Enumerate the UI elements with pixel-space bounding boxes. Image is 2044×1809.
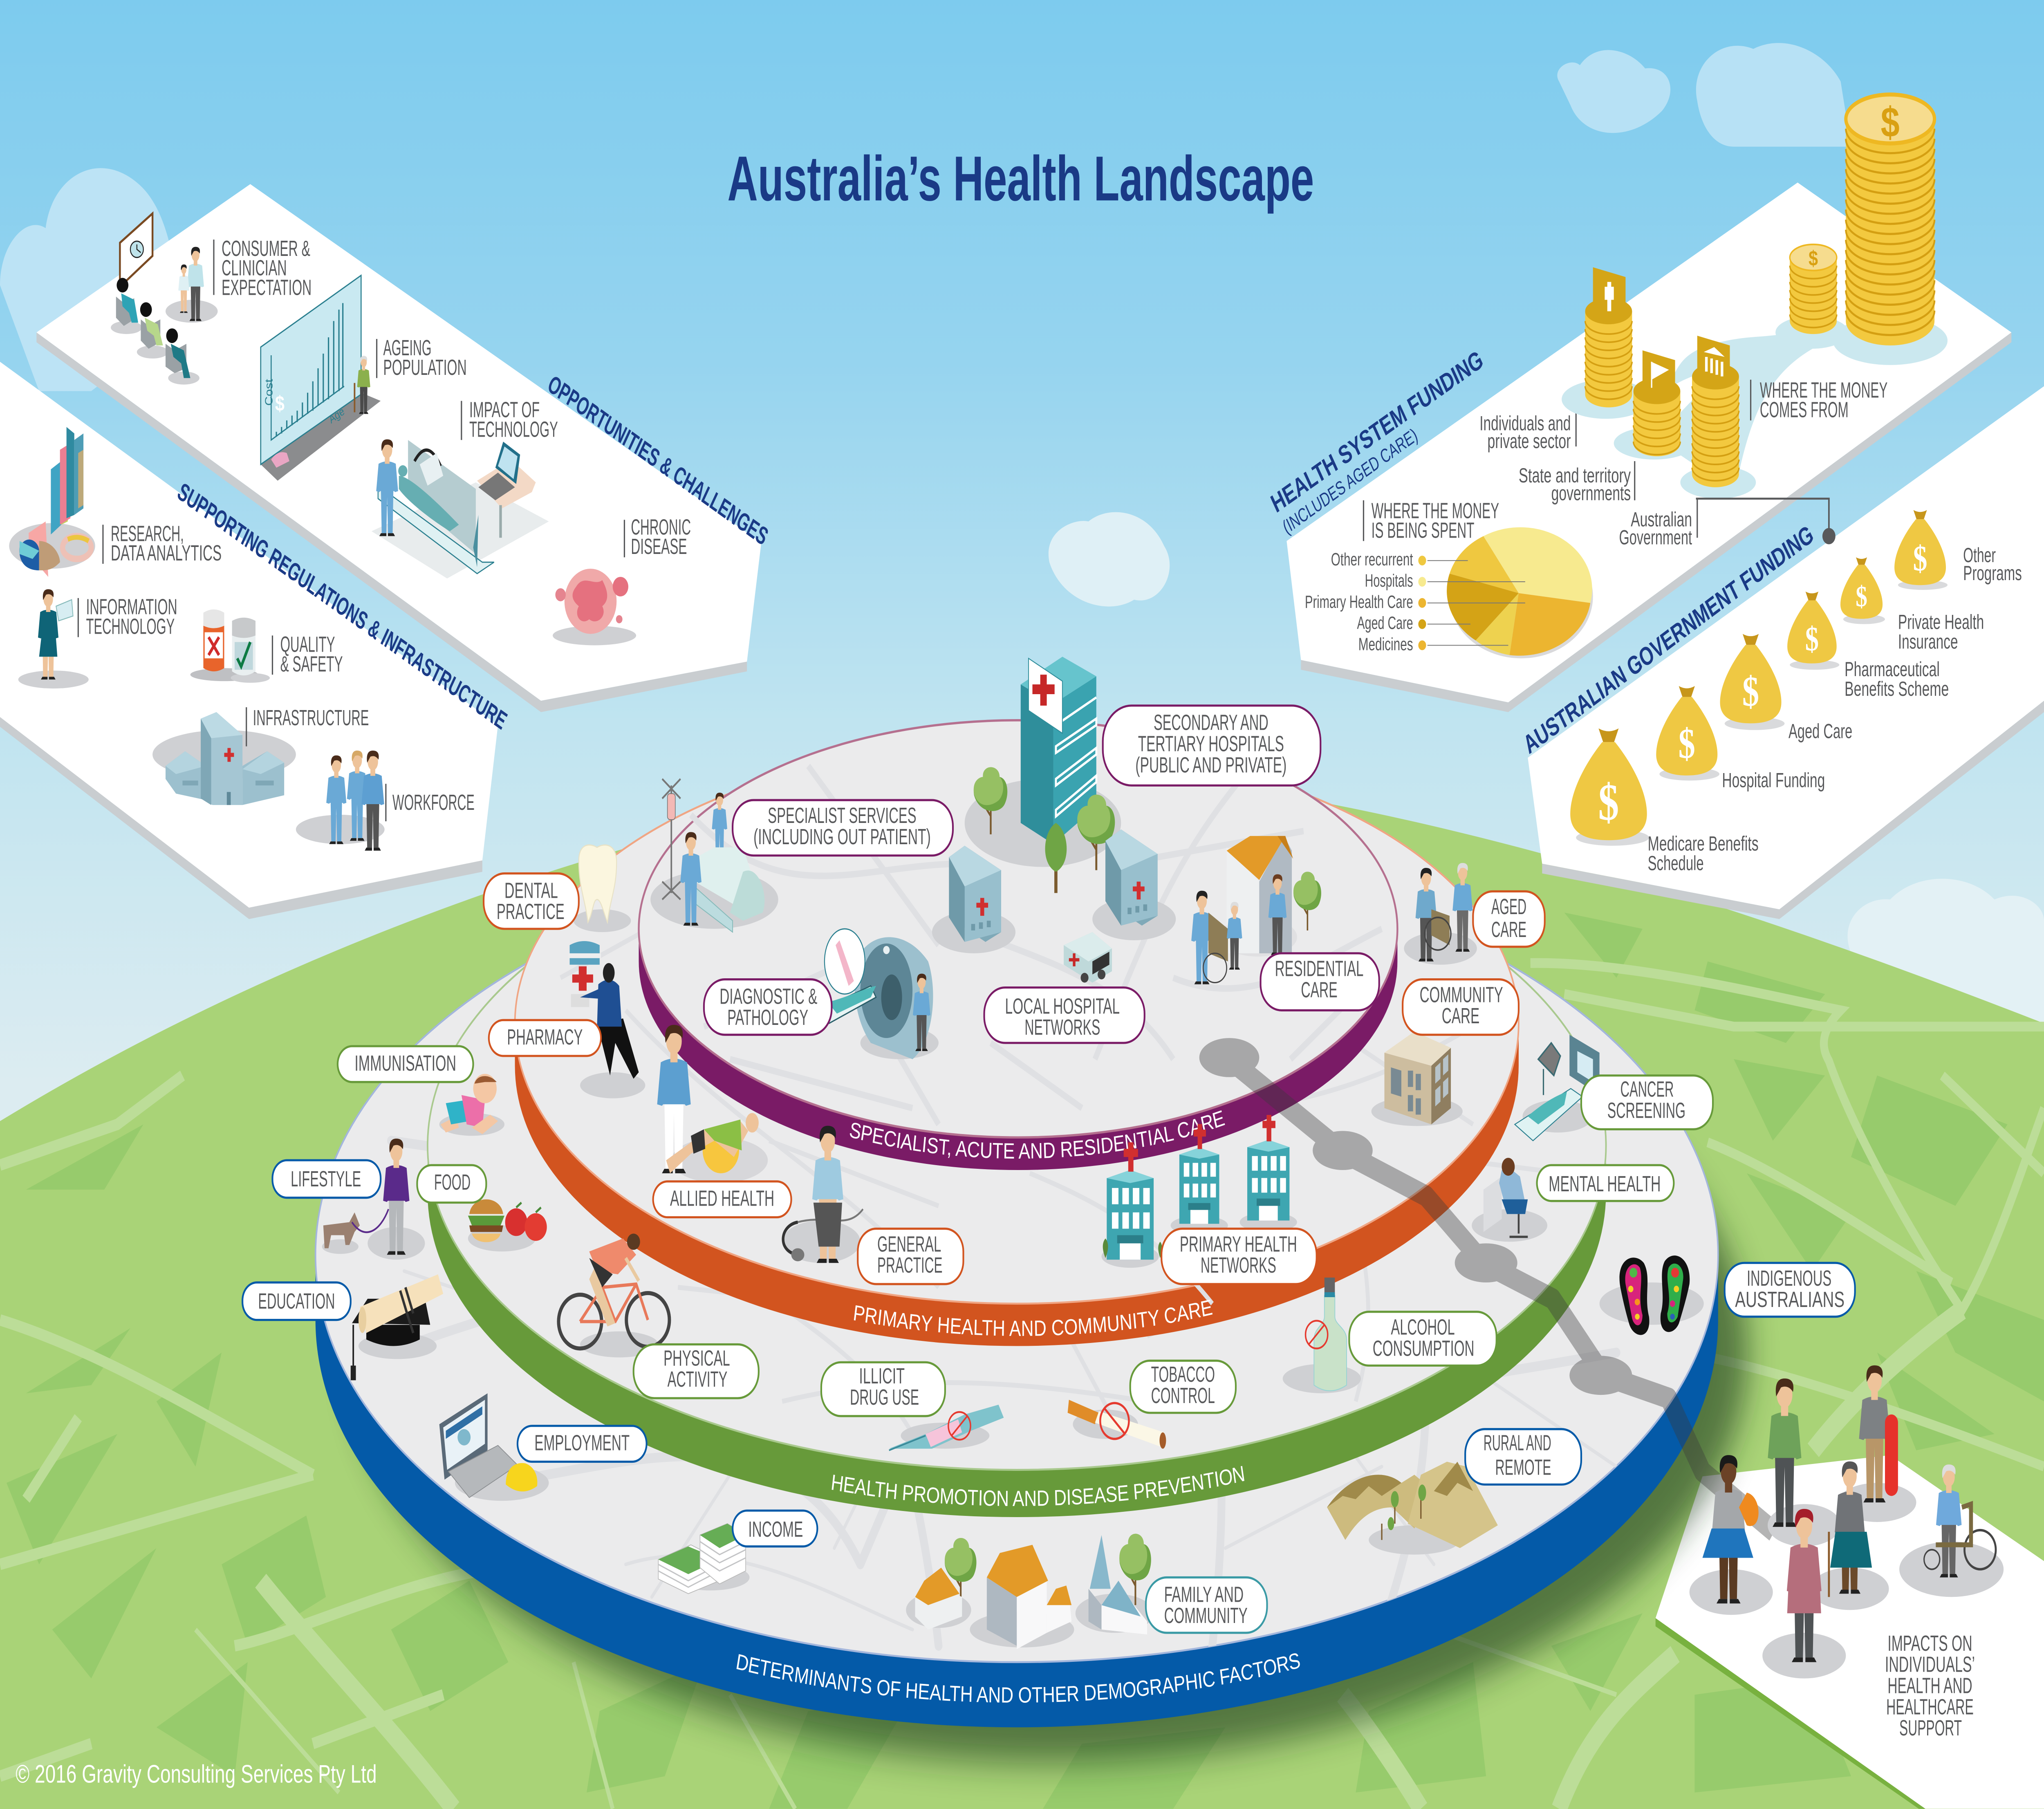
label: pharmacy: PHARMACY: [507, 1025, 583, 1049]
label: allied health: ALLIED HEALTH: [670, 1186, 774, 1211]
title: Australia’s Health Landscape: [727, 143, 1314, 214]
icon: family community houses: [906, 1534, 1154, 1649]
panel: supporting regulations and infrastructure: [0, 362, 511, 919]
chart: cost by age: $: [275, 392, 285, 415]
icon: no smoking cigarette: [1068, 1400, 1166, 1449]
icon: large coin stack: $: [1881, 99, 1900, 146]
label: secondary and tertiary hospitals: [1103, 706, 1320, 785]
label: illicit drug use: [821, 1362, 945, 1416]
label: food: FOOD: [434, 1170, 471, 1195]
label: diagnostic and pathology: PATHOLOGY: [727, 1006, 808, 1030]
label: general practice: PRACTICE: [877, 1253, 942, 1278]
icon: large coin stack: [1833, 94, 1948, 365]
label: private health insurance: Private Health: [1898, 610, 1984, 634]
label: information technology: INFORMATION: [86, 595, 177, 619]
label: specialist services: [733, 800, 953, 856]
icon: medicine bottles: [191, 610, 270, 683]
label: lifestyle: [272, 1160, 381, 1198]
icon: tooth: [574, 845, 631, 932]
label: where the money comes from: WHERE THE MONEY: [1760, 378, 1887, 403]
rim label: health promotion: [830, 1481, 1242, 1506]
icon: income banknotes: [658, 1524, 750, 1594]
label: quality and safety: [272, 632, 343, 676]
label: impacts on individuals: [1885, 1631, 1975, 1740]
icon: tree: [1045, 823, 1067, 893]
label: aged care funding: Aged Care: [1788, 720, 1852, 743]
label: family and community: COMMUNITY: [1164, 1604, 1248, 1628]
label: other programs: [1963, 544, 2022, 585]
disc: health promotion layer: [428, 821, 1606, 1517]
icon: chronic disease cell: [553, 569, 636, 645]
label: aged care: AGED: [1491, 895, 1526, 919]
icon: cancer screening machine: [1515, 1035, 1600, 1141]
label: secondary and tertiary hospitals: SECONDARY AND: [1154, 711, 1269, 735]
label: community care: CARE: [1442, 1004, 1479, 1028]
person: older woman with cane: [1829, 1462, 1872, 1597]
label: state and territory governments: [1519, 461, 1635, 505]
disc: determinants layer: DETERMINANTS OF HEALTH AND OTHER DEMOGRAPHIC FACTORS: [734, 1648, 1302, 1708]
icon: aged care people and walker: [1404, 863, 1477, 965]
label: consumer and clinician expectation: CLINICIAN: [222, 256, 287, 280]
icon: private health insurance bag: [1840, 557, 1885, 624]
label: specialist services: SPECIALIST SERVICES: [768, 803, 917, 828]
label: consumer and clinician expectation: EXPECTATION: [222, 276, 312, 300]
icon: medicare bag: $: [1598, 773, 1619, 831]
green hillside with roads: [0, 778, 2044, 1809]
label: income: [733, 1511, 817, 1547]
label: impacts on individuals: HEALTHCARE: [1886, 1695, 1974, 1719]
heading: opportunities and challenges: OPPORTUNITIES & CHALLENGES: [544, 370, 772, 551]
icon: local hospital block: [932, 846, 1015, 953]
icon: other programs bag: $: [1913, 539, 1927, 578]
label: research: [103, 522, 222, 565]
icon: individuals coin stack: [1562, 267, 1650, 419]
icon: hospital infrastructure: [152, 712, 296, 805]
icon: primary health network buildings: [1102, 1115, 1297, 1268]
icon: pharmaceutical bag: $: [1805, 620, 1819, 658]
icon: alcohol bottle and ban: [1283, 1278, 1361, 1393]
icon: tree: [1077, 795, 1115, 870]
label: individuals and private sector: private sector: [1487, 430, 1571, 453]
label: impact of technology: IMPACT OF: [469, 398, 540, 422]
icon: small coin stack: $: [1809, 247, 1818, 270]
icon: state coin stack: [1614, 350, 1694, 460]
label: where the money is being spent: [1363, 499, 1499, 543]
label: education: [242, 1282, 351, 1320]
label: indigenous australians: AUSTRALIANS: [1735, 1287, 1845, 1312]
label: income: INCOME: [748, 1517, 803, 1542]
person: woman in blue skirt: [1703, 1455, 1759, 1603]
label: ageing population: POPULATION: [383, 355, 467, 380]
icon: food burger and apples: [468, 1199, 547, 1251]
legend: spending categories: Medicines: [1358, 634, 1413, 654]
icon: money flow channels: [1643, 332, 1825, 481]
label: local hospital networks: LOCAL HOSPITAL: [1005, 994, 1120, 1018]
legend: spending categories: Hospitals: [1365, 571, 1413, 591]
icon: aged care bag: $: [1742, 668, 1759, 715]
label: impacts on individuals: HEALTH AND: [1887, 1674, 1972, 1698]
label: immunisation: IMMUNISATION: [354, 1051, 456, 1076]
label: alcohol consumption: [1349, 1312, 1497, 1365]
label: illicit drug use: ILLICIT: [859, 1364, 905, 1388]
label: medicare benefits schedule: Medicare Benefits: [1648, 832, 1759, 855]
label: australian government: [1619, 499, 1697, 549]
icon: australian government coin stack: [1680, 336, 1756, 499]
label: australian government: Government: [1619, 526, 1692, 549]
label: physical activity: [634, 1344, 759, 1398]
legend: spending categories: [1305, 550, 1426, 654]
label: tobacco control: [1130, 1361, 1236, 1413]
label: other programs: Other: [1963, 544, 1996, 567]
label: medicare benefits schedule: Schedule: [1648, 852, 1704, 875]
rim label: specialist acute residential care: [849, 1126, 1221, 1159]
label: alcohol consumption: ALCOHOL: [1391, 1315, 1455, 1340]
icon: employment computer and hard hat: [439, 1393, 549, 1501]
label: cancer screening: [1581, 1076, 1713, 1129]
label: aged care: CARE: [1491, 917, 1526, 942]
heading: supporting regulations: SUPPORTING REGULATIONS & INFRASTRUCTURE: [174, 477, 511, 735]
label: dental practice: [484, 874, 579, 929]
label: infrastructure: INFRASTRUCTURE: [253, 706, 369, 730]
icon: indigenous footprints: [1600, 1255, 1704, 1335]
label: diagnostic and pathology: DIAGNOSTIC &: [719, 984, 817, 1009]
label: pharmaceutical benefits scheme: Pharmaceutical: [1845, 658, 1940, 681]
icon: aged care bag: [1720, 634, 1784, 730]
panel: australian government funding: [1520, 386, 2044, 919]
rim label: primary health and community care: [852, 1315, 1210, 1336]
label: tobacco control: TOBACCO: [1151, 1363, 1215, 1387]
label: employment: [518, 1426, 647, 1462]
road details: [560, 912, 1499, 1304]
label: state and territory governments: governments: [1551, 482, 1631, 505]
icon: CT scanner: [372, 439, 549, 578]
label: secondary and tertiary hospitals: TERTIARY HOSPITALS: [1138, 732, 1284, 756]
person: man in wheelchair: [1924, 1464, 1996, 1578]
label: primary health networks: PRIMARY HEALTH: [1180, 1232, 1297, 1256]
label: research: RESEARCH,: [111, 522, 184, 546]
icon: ambulance: [1064, 932, 1112, 983]
label: local hospital networks: [984, 988, 1145, 1043]
label: dental practice: DENTAL: [504, 879, 558, 903]
chart: cost by age: Age: [327, 405, 346, 426]
heading: health system funding: HEALTH SYSTEM FUNDING: [1267, 345, 1487, 518]
label: hospital funding: Hospital Funding: [1722, 769, 1825, 791]
label: mental health: [1537, 1165, 1674, 1201]
label: other programs: Programs: [1963, 562, 2022, 585]
label: local hospital networks: NETWORKS: [1024, 1015, 1100, 1040]
label: diagnostic and pathology: [704, 980, 831, 1035]
label: rural and remote: REMOTE: [1495, 1455, 1551, 1480]
icon: other programs bag: [1894, 510, 1948, 590]
icon: lifestyle walker and dog: [322, 1139, 425, 1260]
label: impacts on individuals: INDIVIDUALS’: [1885, 1652, 1975, 1677]
label: chronic disease: [624, 515, 691, 559]
chart: cost by age: [261, 276, 381, 481]
icon: general practice doctor and stethoscope: [782, 1126, 863, 1263]
icon: hospital funding bag: [1656, 686, 1719, 780]
panel: health system funding: [1267, 94, 2011, 712]
icon: residential care house and people: [1191, 836, 1321, 984]
disc shadow: [353, 942, 1748, 1763]
subheading: includes aged care: (INCLUDES AGED CARE): [1280, 424, 1421, 538]
label: allied health: [653, 1181, 791, 1217]
label: community care: COMMUNITY: [1420, 983, 1503, 1007]
icon: immunisation baby: [439, 1074, 504, 1136]
person: woman in headscarf: [1787, 1509, 1822, 1662]
label: dental practice: PRACTICE: [497, 900, 565, 924]
label: general practice: GENERAL: [877, 1232, 941, 1256]
icon: small coin stack: [1775, 244, 1849, 349]
disc: primary health layer: [515, 743, 1519, 1346]
label: education: EDUCATION: [258, 1289, 335, 1314]
label: information technology: TECHNOLOGY: [86, 614, 175, 639]
label: individuals and private sector: [1479, 408, 1576, 453]
chart: cost by age: Cost: [263, 379, 275, 406]
label: chronic disease: DISEASE: [631, 535, 687, 559]
connector: government funding link: [1696, 499, 1836, 544]
label: where the money comes from: [1751, 378, 1887, 422]
disc: health promotion layer: HEALTH PROMOTION AND DISEASE PREVENTION: [830, 1462, 1246, 1511]
label: lifestyle: LIFESTYLE: [291, 1167, 361, 1191]
heading: australian government funding: AUSTRALIAN GOVERNMENT FUNDING: [1520, 520, 1818, 760]
icon: tree: [974, 767, 1007, 834]
label: medicare benefits schedule: [1648, 832, 1759, 875]
legend: spending categories: Primary Health Care: [1305, 592, 1413, 612]
label: illicit drug use: DRUG USE: [850, 1385, 919, 1410]
label: where the money comes from: COMES FROM: [1760, 398, 1849, 422]
clouds: [0, 43, 2044, 1027]
icon: private health insurance bag: $: [1856, 581, 1867, 613]
icon: education cap and scroll: [351, 1274, 443, 1380]
label: where the money is being spent: WHERE THE MONEY: [1372, 499, 1499, 523]
label: general practice: [858, 1228, 964, 1284]
label: rural and remote: [1465, 1429, 1581, 1484]
label: chronic disease: CHRONIC: [631, 515, 691, 540]
icon: research data analytics: [9, 427, 95, 577]
label: alcohol consumption: CONSUMPTION: [1373, 1336, 1475, 1361]
icon: community building: [1372, 1031, 1463, 1126]
label: residential care: CARE: [1301, 978, 1338, 1002]
label: immunisation: [338, 1046, 473, 1082]
label: pharmaceutical benefits scheme: Benefits Scheme: [1845, 677, 1949, 700]
label: primary health networks: NETWORKS: [1201, 1253, 1276, 1278]
person: man in green: [1768, 1379, 1802, 1527]
icon: clinic waiting group: [111, 213, 218, 385]
icon: no drugs syringe: [889, 1405, 1004, 1450]
icon: hospital funding bag: $: [1679, 720, 1695, 767]
label: workforce: WORKFORCE: [392, 791, 475, 815]
label: impacts on individuals: IMPACTS ON: [1887, 1631, 1972, 1656]
label: quality and safety: QUALITY: [280, 632, 335, 657]
label: tobacco control: CONTROL: [1151, 1384, 1215, 1408]
label: pharmaceutical benefits scheme: [1845, 658, 1949, 700]
label: ageing population: AGEING: [383, 336, 431, 360]
disc: determinants layer: [316, 782, 1718, 1727]
label: individuals and private sector: Individuals and: [1479, 412, 1571, 435]
icon: secondary hospital tower: [965, 657, 1121, 867]
label: secondary and tertiary hospitals: (PUBLIC AND PRIVATE): [1135, 753, 1286, 778]
label: consumer and clinician expectation: CONSUMER &: [222, 236, 310, 261]
label: information technology: [78, 595, 177, 639]
disc: specialist layer: SPECIALIST, ACUTE AND RESIDENTIAL CARE: [847, 1106, 1227, 1163]
copyright: © 2016 Gravity Consulting Services Pty Ltd: [16, 1760, 377, 1788]
icon: allied health physio and ball: [657, 1025, 768, 1183]
label: ageing population: [377, 336, 467, 380]
icon: woman with tablet: [18, 589, 89, 688]
legend: spending categories: Aged Care: [1357, 613, 1413, 633]
icon: medicare bag: [1570, 729, 1649, 846]
icon: rural mountains: [1327, 1462, 1498, 1555]
shadows: [1690, 1483, 2004, 1679]
label: physical activity: ACTIVITY: [668, 1367, 727, 1392]
label: private health insurance: [1898, 610, 1984, 653]
label: primary health networks: [1161, 1228, 1317, 1284]
icon: mental health person at desk: [1472, 1158, 1547, 1242]
chart: pie where the money is spent: [1428, 527, 1593, 658]
label: rural and remote: RURAL AND: [1484, 1431, 1551, 1455]
panel: opportunities and challenges: [36, 184, 772, 712]
arrow: path from system to individuals: [1199, 1038, 1774, 1532]
panel: impacts on individuals people: [1690, 1365, 2004, 1740]
rim label: determinants of health: [735, 1669, 1296, 1703]
label: physical activity: PHYSICAL: [663, 1346, 730, 1370]
icon: workforce group: [296, 751, 385, 851]
label: residential care: RESIDENTIAL: [1275, 957, 1363, 981]
label: where the money is being spent: IS BEING SPENT: [1372, 518, 1475, 543]
label: community care: [1403, 980, 1519, 1035]
label: pharmacy: [489, 1020, 601, 1056]
label: cancer screening: CANCER: [1620, 1077, 1674, 1102]
label: specialist services: (INCLUDING OUT PATIENT): [753, 825, 931, 849]
label: mental health: MENTAL HEALTH: [1549, 1172, 1661, 1196]
label: indigenous australians: INDIGENOUS: [1747, 1267, 1831, 1291]
disc: primary health layer: PRIMARY HEALTH AND COMMUNITY CARE: [852, 1295, 1214, 1341]
icon: local hospital block: [1092, 829, 1176, 940]
label: food: [417, 1165, 486, 1203]
label: indigenous australians: [1725, 1263, 1855, 1317]
road details: [691, 766, 1382, 1124]
label: consumer and clinician expectation: [214, 236, 312, 300]
label: state and territory governments: State and territory: [1519, 464, 1631, 487]
panel: impacts on individuals base: [1656, 1455, 2044, 1809]
label: quality and safety: & SAFETY: [280, 652, 343, 676]
label: family and community: FAMILY AND: [1164, 1583, 1244, 1607]
person: man with skateboard: [1859, 1365, 1898, 1502]
road details: [560, 1043, 1564, 1434]
icon: pharmacy man and medicine: [568, 941, 645, 1098]
label: employment: EMPLOYMENT: [534, 1431, 630, 1455]
label: cancer screening: SCREENING: [1607, 1098, 1685, 1123]
icon: cyclist: [558, 1233, 669, 1357]
label: impacts on individuals: SUPPORT: [1899, 1716, 1962, 1740]
legend: spending categories: Other recurrent: [1331, 550, 1413, 569]
icon: pharmaceutical bag: [1787, 592, 1839, 670]
label: aged care: [1473, 891, 1545, 947]
label: impact of technology: TECHNOLOGY: [469, 417, 558, 442]
disc: specialist layer: [639, 720, 1397, 1170]
label: residential care: [1261, 953, 1379, 1010]
label: private health insurance: Insurance: [1898, 630, 1958, 653]
icon: specialist bed and nurses: [650, 779, 778, 932]
label: family and community: [1146, 1578, 1267, 1633]
icon: MRI scanner: [815, 929, 939, 1059]
label: research: DATA ANALYTICS: [111, 541, 222, 565]
road network: [387, 1136, 1620, 1651]
label: australian government: Australian: [1631, 508, 1692, 531]
label: impact of technology: [462, 398, 558, 442]
